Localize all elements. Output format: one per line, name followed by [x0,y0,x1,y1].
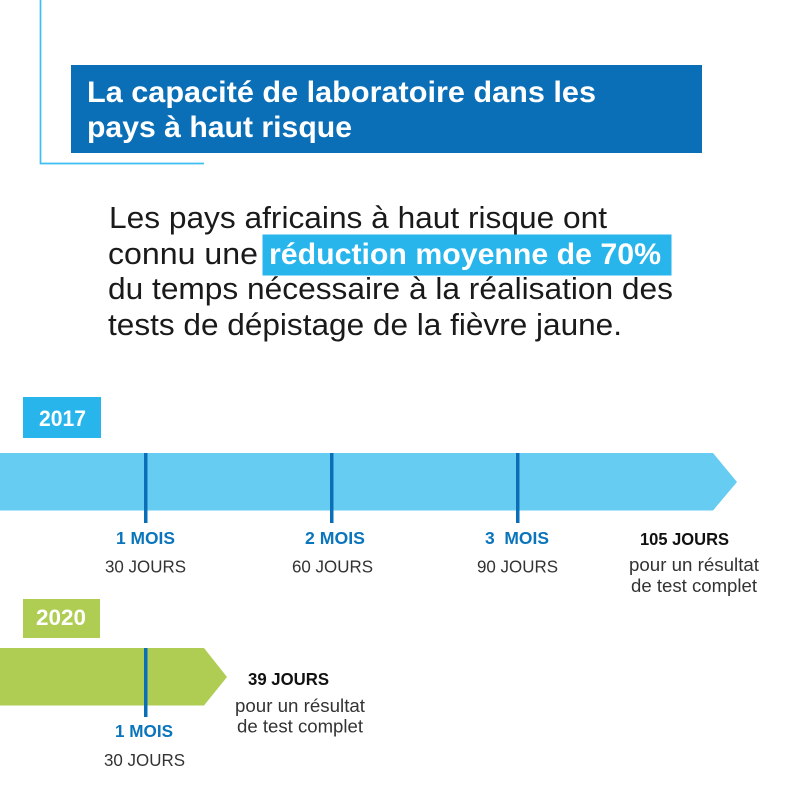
label: 105 jours result: 105 JOURS [640,529,729,549]
label: 39 jours result: de test complet [237,716,363,736]
decorative corner frame [40,0,204,164]
year badge 2017: 2017 [39,406,86,431]
label: 3 mois: 90 JOURS [477,556,558,576]
label: 3 mois: 3 MOIS [485,528,549,548]
label: 105 jours result [629,529,759,596]
label: 2 mois [292,528,373,576]
intro text block: Les pays africains à haut risque ont [109,201,608,235]
label: 1 mois 2020: 30 JOURS [104,750,185,770]
intro text block [108,201,673,342]
label: 2 mois: 60 JOURS [292,556,373,576]
label: 39 jours result: 39 JOURS [248,669,329,689]
title banner: pays à haut risque [87,111,352,144]
label: 105 jours result: de test complet [631,576,757,596]
label: 1 mois: 30 JOURS [105,556,186,576]
label: 2 mois: 2 MOIS [305,528,365,548]
intro text block: connu une [108,237,258,271]
label: 1 mois [105,528,186,576]
label: 1 mois 2020 [104,721,185,770]
year badge 2020: 2020 [36,605,86,630]
label: 105 jours result: pour un résultat [629,555,759,575]
label: 1 mois 2020: 1 MOIS [115,721,173,741]
intro text block: tests de dépistage de la fièvre jaune. [108,308,622,342]
intro text block: réduction moyenne de 70% [269,238,661,271]
year badge 2020 [23,599,100,638]
intro text block: du temps nécessaire à la réalisation des [108,272,673,306]
label: 39 jours result: pour un résultat [235,696,365,716]
timeline arrow 2020 [0,648,227,717]
timeline arrow 2017 [0,453,737,523]
title banner [71,65,702,153]
title banner: La capacité de laboratoire dans les [87,76,596,109]
label: 1 mois: 1 MOIS [116,528,175,548]
label: 39 jours result [235,669,365,736]
year badge 2017 [23,397,101,438]
label: 3 mois [477,528,558,576]
